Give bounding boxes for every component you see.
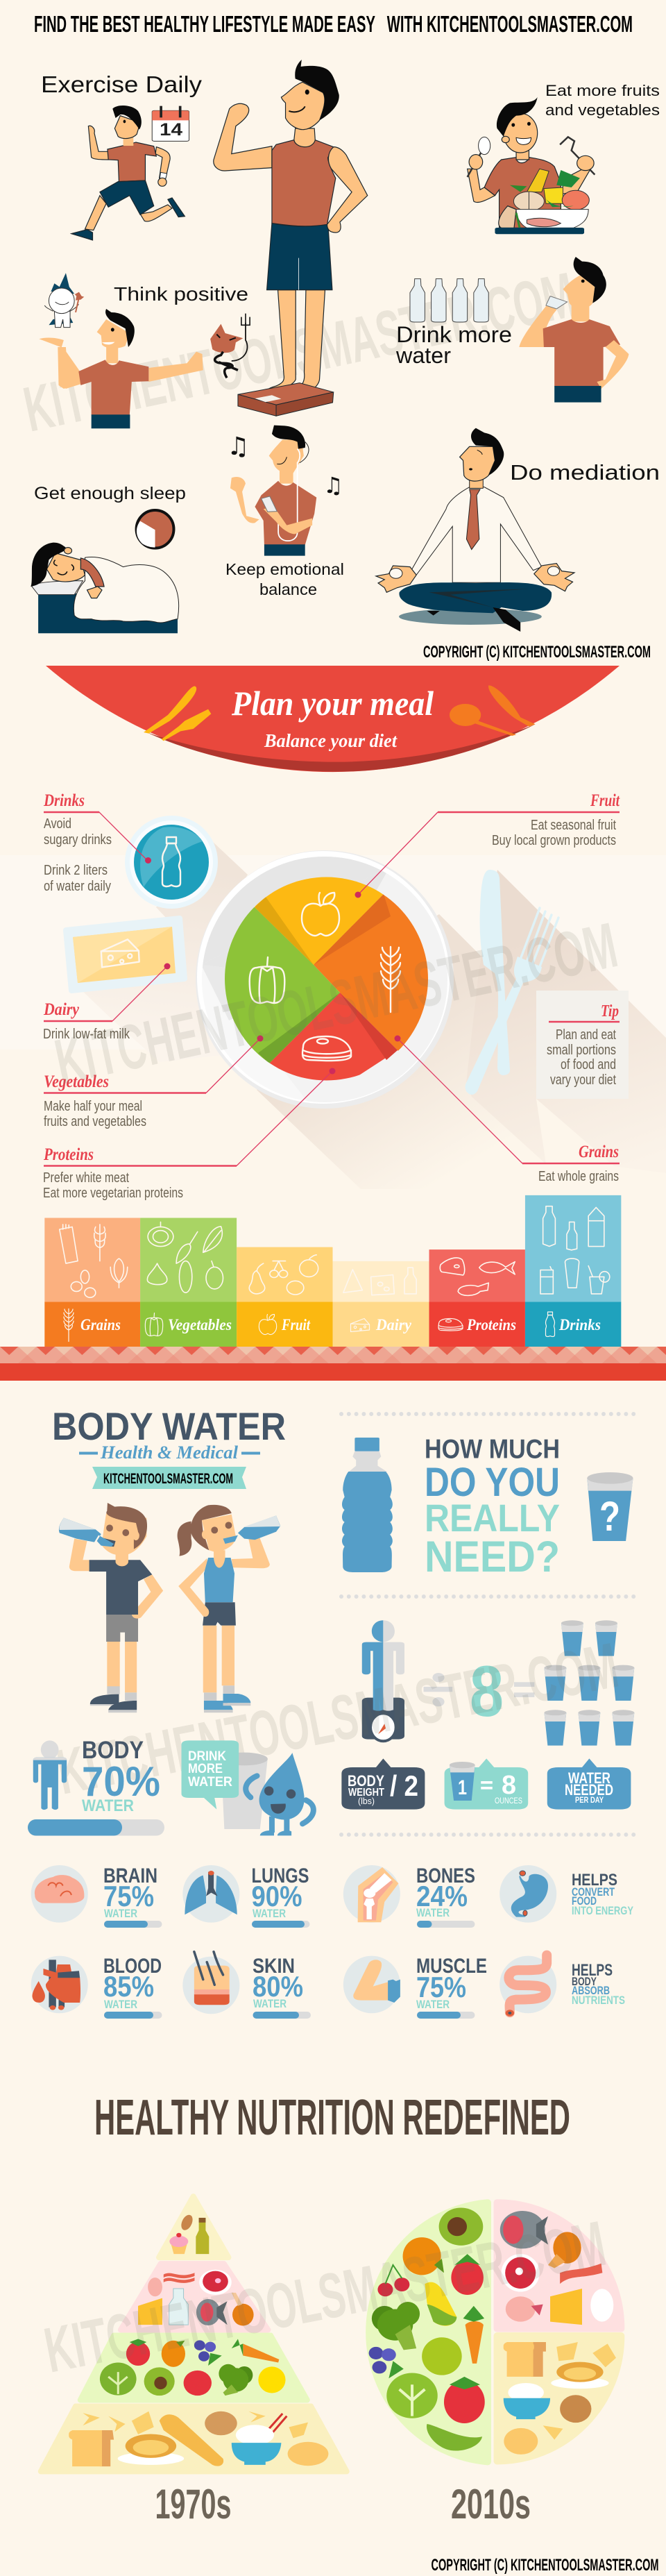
- icon: cutlery on banner: [144, 685, 536, 741]
- icon: running man: [71, 106, 185, 240]
- plate sections: [369, 2203, 621, 2461]
- bar label: vegetables: Vegetables: [168, 1316, 232, 1333]
- heading: drink more water: water: [395, 343, 451, 368]
- callout: vegetables: fruits and vegetables: [44, 1114, 146, 1129]
- icon: bar apple: [259, 1314, 277, 1335]
- callout: one glass equals eight ounces: [445, 1758, 528, 1810]
- callout: grains: Grains: [579, 1143, 619, 1161]
- heading: drink more water: Drink more: [396, 322, 512, 347]
- callout: water needed per day: NEEDED: [565, 1781, 613, 1799]
- stat: lungs: [251, 1864, 309, 1928]
- callout: drink more water: DRINK: [188, 1749, 226, 1764]
- callout: fruit: Eat seasonal fruit: [531, 818, 616, 833]
- heading: keep emotional balance: [225, 560, 344, 598]
- icon: knee bones: [358, 1867, 398, 1922]
- heading: exercise daily: Exercise Daily: [41, 71, 203, 97]
- icon: clock: [137, 510, 173, 548]
- bar icons: dairy: [343, 1268, 416, 1295]
- bar icons: grains: [60, 1224, 128, 1297]
- callout: drinks: Avoid: [44, 816, 71, 832]
- bar icons: vegetables: [147, 1222, 223, 1293]
- stat: stomach helps: FOOD: [572, 1894, 597, 1908]
- callout: dairy: Drink low-fat milk: [43, 1027, 130, 1042]
- stat: muscle: MUSCLE: [416, 1955, 487, 1978]
- icon: apple: [302, 893, 339, 936]
- icon: steak: [302, 1036, 351, 1061]
- callout: drinks: of water daily: [44, 879, 111, 894]
- icon: bar steak: [438, 1319, 463, 1331]
- icon: stomach: [511, 1871, 548, 1917]
- equation: divide by eight equals: 8: [470, 1651, 504, 1732]
- banner title: Plan your meal: [231, 684, 434, 723]
- icon: question glass: ?: [599, 1493, 620, 1540]
- callout: one glass equals eight ounces: OUNCES: [495, 1796, 522, 1805]
- heading: keep emotional balance: Keep emotional: [225, 560, 344, 578]
- callout: dairy: Dairy: [43, 1000, 80, 1019]
- tip text: small portions: [547, 1043, 616, 1058]
- icon: intestine: [506, 1955, 547, 2017]
- equation: divide by eight equals: [424, 1651, 534, 1732]
- icon: bar pepper: [145, 1313, 163, 1336]
- icon: drinks plate: [125, 816, 218, 909]
- icon: water drop with glass: [221, 1753, 314, 1835]
- stat: blood: [103, 1955, 162, 2019]
- callout: proteins: Proteins: [43, 1145, 94, 1164]
- icon: question glass: [587, 1472, 633, 1541]
- progress: body: [28, 1819, 164, 1835]
- dotted divider two: [341, 1594, 636, 1599]
- tablecloth band: [0, 1347, 666, 1381]
- stat: stomach helps: CONVERT: [572, 1885, 615, 1899]
- stat: brain: 75%: [103, 1880, 154, 1912]
- heading: body water: BODY WATER: [52, 1404, 286, 1448]
- callout: water needed per day: WATER: [568, 1769, 610, 1787]
- callout: drinks: Drink 2 liters: [44, 863, 108, 878]
- callout: one glass equals eight ounces: 1: [458, 1776, 467, 1799]
- bar label: grains: Grains: [80, 1316, 121, 1333]
- callout: water needed per day: PER DAY: [575, 1795, 604, 1805]
- panel: body seventy percent: [28, 1737, 164, 1835]
- tip card: [536, 991, 629, 1099]
- icon: man drinking: [59, 1503, 163, 1712]
- stat: blood: BLOOD: [103, 1955, 162, 1978]
- callout: fruit: Fruit: [590, 791, 620, 810]
- icon: woman sleeping in bed: [31, 543, 179, 633]
- stat: intestine helps: BODY: [572, 1975, 597, 1988]
- callout: drink more water: [181, 1740, 239, 1810]
- heading: drink more water: [395, 322, 512, 368]
- chart: 2010s food plate: [369, 2203, 621, 2461]
- tip heading: Tip: [601, 1002, 619, 1020]
- vegetables and fruit: [369, 2207, 485, 2450]
- icon: bar cheese: [351, 1319, 369, 1331]
- icon: cheese: [101, 939, 139, 967]
- stat: blood: WATER: [104, 1998, 137, 2011]
- stat: muscle: WATER: [416, 1998, 450, 2011]
- label: 1970s: 1970s: [155, 2481, 232, 2527]
- stat: lungs: WATER: [253, 1907, 286, 1920]
- icon: man thinking: [39, 309, 203, 428]
- dotted divider one: [341, 1412, 636, 1416]
- ribbon: kitchentoolsmaster: KITCHENTOOLSMASTER.COM: [103, 1471, 233, 1487]
- main plate with food groups: [196, 850, 454, 1109]
- callout: vegetables: Vegetables: [44, 1072, 109, 1091]
- label: 2010s: 2010s: [451, 2481, 531, 2527]
- icon: heart: [32, 1960, 80, 2010]
- bar icons: proteins: [440, 1258, 515, 1295]
- chart: 1970s food pyramid: [41, 2196, 347, 2471]
- fork: [465, 908, 558, 1095]
- stat: intestine helps: HELPS: [572, 1961, 613, 1980]
- icon: body figure: [33, 1740, 67, 1810]
- long shadows behind plate: [82, 842, 666, 1189]
- panel: body seventy percent: BODY: [82, 1737, 144, 1764]
- icon: dairy card: [66, 918, 185, 991]
- callout: vegetables: [44, 1036, 264, 1129]
- icon: devil: [210, 314, 250, 378]
- banner shadow crescent: [146, 724, 536, 772]
- heading: do mediation: Do mediation: [510, 460, 660, 485]
- heading: keep emotional balance: balance: [259, 580, 317, 598]
- callout: body weight divided by two: WEIGHT: [348, 1787, 384, 1799]
- heading: how much do you really need: HOW MUCH: [425, 1434, 560, 1465]
- stat: lungs: LUNGS: [251, 1864, 309, 1887]
- heading: how much do you really need: NEED?: [425, 1533, 560, 1581]
- tier three: fruit and vegetables: [100, 2339, 286, 2396]
- callout: body weight divided by two: / 2: [390, 1769, 418, 1802]
- panel: body seventy percent: 70%: [82, 1758, 160, 1805]
- stat: intestine helps: NUTRIENTS: [572, 1994, 625, 2007]
- bar label: dairy: Dairy: [375, 1316, 412, 1333]
- stat: bones: WATER: [416, 1906, 450, 1919]
- callout: dairy: [43, 963, 171, 1042]
- callout: drink more water: WATER: [188, 1775, 232, 1790]
- bar label: proteins: Proteins: [466, 1316, 516, 1333]
- chart: food group servings bars: [44, 1195, 621, 1347]
- stat: muscle: [416, 1955, 487, 2019]
- icon: eight glasses: [544, 1620, 634, 1746]
- heading: think positive: Think positive: [114, 283, 248, 305]
- icon: music note left: ♫: [227, 432, 249, 461]
- calendar number: 14: [160, 120, 182, 140]
- stat: intestine helps: [572, 1961, 625, 2007]
- icon: knife and fork: [465, 870, 558, 1095]
- heading: how much do you really need: REALLY: [425, 1496, 560, 1540]
- stat: brain: BRAIN: [103, 1864, 157, 1887]
- stat: skin: 80%: [253, 1970, 303, 2003]
- tip text: of food and: [561, 1057, 616, 1072]
- icon: meditating man: [376, 428, 574, 632]
- stat: skin: SKIN: [253, 1955, 295, 1978]
- icon: wheat: [381, 947, 400, 1012]
- callout: proteins: [43, 1068, 336, 1201]
- callout: drink more water: MORE: [188, 1762, 223, 1776]
- stat: bones: 24%: [416, 1880, 468, 1912]
- icon: water bottles: [410, 279, 488, 322]
- icon: lungs: [185, 1871, 237, 1914]
- heading: how much do you really need: DO YOU: [425, 1460, 560, 1505]
- knife: [480, 870, 510, 1075]
- pyramid tiers: [41, 2196, 347, 2471]
- pie: food group sectors: [225, 877, 428, 1080]
- callout: drinks: sugary drinks: [44, 832, 112, 848]
- callout: body weight divided by two: [341, 1758, 425, 1810]
- stat: stomach helps: HELPS: [572, 1871, 617, 1889]
- callout: water needed per day: [547, 1758, 631, 1810]
- tier two: protein: [138, 2270, 254, 2325]
- callout: proteins: Prefer white meat: [43, 1170, 129, 1186]
- callout: drinks: [43, 791, 151, 894]
- tip text: Plan and eat: [556, 1027, 616, 1043]
- callout: fruit: [355, 791, 620, 898]
- bar label: drinks: Drinks: [558, 1316, 601, 1333]
- tip text: vary your diet: [550, 1072, 616, 1088]
- stat: brain: [103, 1864, 162, 1928]
- heading: eat more fruits: Eat more fruits: [545, 82, 660, 99]
- icon: angel: [44, 273, 84, 328]
- icon circles: organs row backgrounds: [31, 1865, 556, 2014]
- callout: fruit: Buy local grown products: [492, 833, 616, 848]
- stat: bones: [416, 1864, 475, 1928]
- heading: eat more fruits: [545, 82, 660, 119]
- icon: bar bottle: [545, 1312, 555, 1336]
- grains: [504, 2342, 616, 2455]
- icon: man drinking water: [519, 257, 629, 403]
- callout: body weight divided by two: BODY: [348, 1772, 384, 1790]
- icon: bar wheat: [64, 1309, 74, 1341]
- stat: bones: BONES: [416, 1864, 475, 1887]
- stat: stomach helps: [572, 1871, 633, 1917]
- proteins: [500, 2211, 613, 2325]
- icon: pepper: [250, 957, 284, 1003]
- panel: plan your meal banner: [46, 666, 620, 772]
- callout: body weight divided by two: (lbs): [358, 1796, 375, 1806]
- stat: skin: WATER: [253, 1997, 287, 2010]
- icon: brain: [35, 1875, 84, 1903]
- callout: vegetables: Make half your meal: [44, 1099, 142, 1114]
- icon: main man on scale: [214, 60, 368, 416]
- stat: skin: [253, 1955, 311, 2019]
- stat: lungs: 90%: [251, 1880, 302, 1912]
- tier four: grains: [69, 2411, 328, 2466]
- callout: grains: Eat whole grains: [538, 1169, 619, 1184]
- icon: man eating with salad bowl: [468, 97, 595, 234]
- stat: intestine helps: ABSORB: [572, 1984, 610, 1997]
- heading: eat more fruits: and vegetables: [545, 101, 660, 119]
- icon: man listening to music: [230, 426, 316, 556]
- stat: brain: WATER: [104, 1907, 137, 1920]
- tip text: [547, 1027, 616, 1088]
- icon: half full person on scale: [362, 1620, 404, 1741]
- callout: drinks: Drinks: [43, 791, 85, 810]
- bar icons: drinks: [540, 1206, 610, 1294]
- banner subtitle: Balance your diet: [264, 730, 398, 751]
- icon: skin layers: [194, 1952, 230, 2005]
- panel: body seventy percent: WATER: [82, 1796, 134, 1815]
- heading: how much do you really need: [425, 1434, 560, 1581]
- stat: blood: 85%: [103, 1970, 154, 2003]
- icon: big water bottle: [342, 1438, 393, 1572]
- callout: grains: [394, 1036, 620, 1184]
- ribbon: kitchentoolsmaster: [92, 1467, 246, 1489]
- icon: muscle arm: [353, 1960, 400, 2003]
- subheading: health and medical: Health & Medical: [100, 1442, 239, 1463]
- icon: music note right: ♫: [323, 472, 343, 498]
- bar icons: fruit: [249, 1255, 318, 1295]
- tier one: sweets and oils: [169, 2214, 209, 2254]
- stat: muscle: 75%: [416, 1971, 466, 2003]
- dotted divider three: [341, 1833, 636, 1837]
- stat: stomach helps: INTO ENERGY: [572, 1904, 633, 1917]
- icon: woman drinking: [178, 1505, 280, 1712]
- heading: get enough sleep: Get enough sleep: [34, 484, 186, 503]
- callout: one glass equals eight ounces: 8: [502, 1771, 516, 1800]
- icon: calendar: [152, 106, 189, 141]
- callout: proteins: Eat more vegetarian proteins: [43, 1186, 183, 1201]
- bar label: fruit: Fruit: [281, 1316, 310, 1333]
